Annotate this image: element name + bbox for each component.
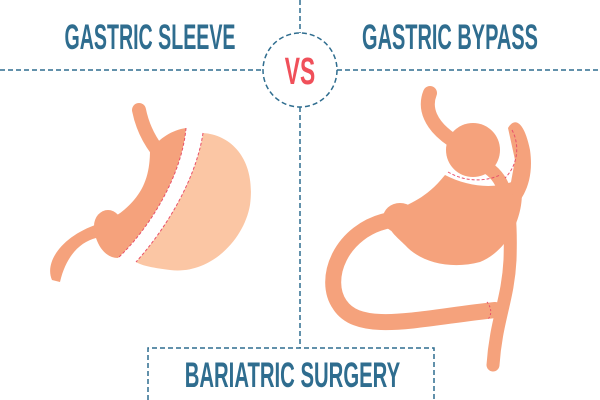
title: gastric sleeve: GASTRIC SLEEVE (65, 18, 235, 57)
bottom label box (148, 348, 434, 400)
title: bariatric surgery: BARIATRIC SURGERY (185, 356, 400, 395)
illustration: gastric sleeve (50, 110, 251, 282)
vs badge (263, 33, 337, 107)
illustration: gastric bypass (333, 93, 531, 365)
vs badge: VS (285, 50, 315, 92)
title: gastric bypass: GASTRIC BYPASS (362, 18, 538, 57)
